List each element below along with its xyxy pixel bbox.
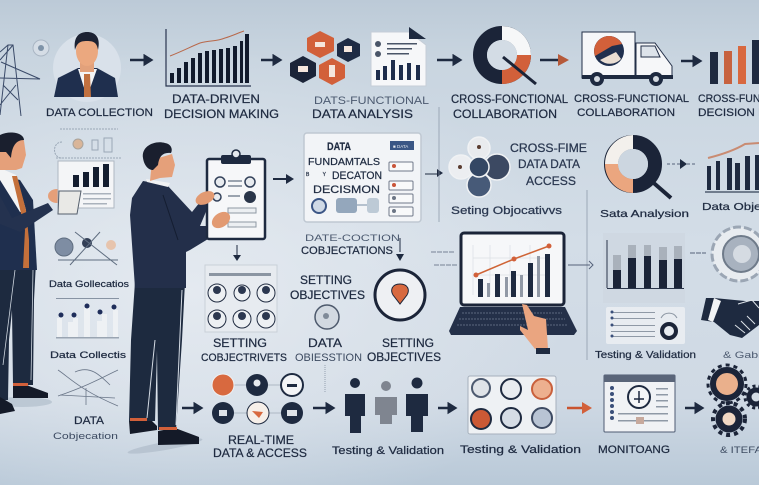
- arrow: [667, 159, 695, 169]
- row 1 labels: DATS-FUNCTIONAL: [314, 95, 429, 107]
- arrow: [685, 407, 697, 409]
- arrow: [431, 252, 458, 265]
- label: OBJECTIVES: [290, 290, 365, 302]
- icon: pointing hand: [520, 304, 550, 354]
- figure: left businessman: [0, 133, 66, 414]
- arrow: [261, 59, 275, 61]
- row 1 labels: COLLABORATION: [577, 107, 675, 119]
- label: COBJECTRIVETS: [201, 352, 287, 364]
- icon: hexagon cluster: [290, 31, 360, 85]
- label: [290, 273, 365, 302]
- label: [301, 233, 400, 257]
- icon: delivery truck: [582, 32, 673, 86]
- chart: report with bars: [58, 161, 114, 214]
- icon: faded network: [55, 232, 118, 265]
- label: Data Objec: [702, 201, 759, 213]
- label: CROSS-FIME: [510, 143, 587, 155]
- panel: icon grid: [468, 376, 556, 434]
- icon: small circle badge: [315, 305, 339, 329]
- icon group: real-time circles: [212, 374, 303, 424]
- row 1 labels: DATA COLLECTION: [46, 107, 153, 119]
- label: DATA DATA: [518, 159, 580, 171]
- icon: donut with magnifier: [480, 26, 536, 84]
- icon: gear: [712, 227, 759, 281]
- row 1 labels: [46, 92, 759, 121]
- arrow: [690, 252, 706, 254]
- label: [201, 338, 287, 364]
- panel: data fundamentals: DECISMON: [313, 184, 380, 196]
- label: [53, 415, 118, 442]
- label: & Gabb: [723, 350, 759, 361]
- label: [451, 143, 587, 217]
- icon: donut with magnifier 2: [605, 135, 671, 198]
- row 1 labels: CROSS-FONCTIONAL: [451, 92, 568, 106]
- icon: petal cluster: [449, 137, 510, 197]
- label: OBJECTIVES: [367, 352, 441, 364]
- bar chart: right edge: [710, 40, 759, 84]
- label: Testing & Validation: [332, 445, 444, 457]
- arrow: [681, 60, 695, 62]
- label: SETTING: [382, 338, 434, 350]
- label: DATA: [308, 336, 342, 350]
- label: [213, 435, 307, 460]
- label: DATA & ACCESS: [213, 446, 307, 460]
- label: Testing & Validation: [460, 444, 581, 456]
- panel: data fundamentals: DECATON: [332, 170, 382, 182]
- arrow: [437, 59, 455, 61]
- icon: three people: [345, 378, 428, 433]
- arrow: [273, 178, 288, 180]
- chart: faded bars with dots: [56, 298, 119, 338]
- arrow: [567, 402, 592, 414]
- chart: rising bars with trend line: [166, 29, 251, 86]
- label: ACCESS: [526, 176, 576, 188]
- arrow: [540, 54, 569, 66]
- panel: data fundamentals: ■ DATA: [393, 144, 408, 149]
- label: Data Collectis: [50, 350, 126, 361]
- label: & ITEFA: [720, 445, 759, 456]
- chart: stacked bars: [603, 233, 685, 303]
- icon: laptop with chart: [449, 233, 577, 335]
- icon: gears: [708, 365, 759, 435]
- arrow: [233, 245, 241, 261]
- arrow: [396, 238, 404, 261]
- row 1 labels: COLLABORATION: [453, 107, 557, 121]
- label: COBJECTATIONS: [301, 245, 393, 257]
- panel: data fundamentals: DATA: [327, 141, 351, 153]
- label: Data Gollecatios: [49, 279, 129, 290]
- row 1 labels: DATA-DRIVEN: [172, 92, 260, 106]
- icon: clipboard: [193, 150, 265, 239]
- panel: checklist with ring: [606, 307, 685, 344]
- panel: data fundamentals: BY: [306, 172, 327, 178]
- label: SETTING: [213, 338, 267, 350]
- panel: data fundamentals: [304, 133, 421, 222]
- arrow: [438, 407, 450, 409]
- label: Cobjecation: [53, 431, 118, 442]
- label: SETTING: [300, 273, 352, 287]
- icon: handshake: [701, 298, 759, 338]
- arrow: [568, 261, 593, 269]
- icon: document with chart: [371, 27, 426, 86]
- arrow: [425, 169, 443, 177]
- label: DATE-COCTION: [305, 233, 400, 243]
- label: OBIESSTION: [295, 352, 362, 364]
- row 1 labels: DECISION MAKING: [164, 107, 279, 121]
- label: Testing & Validation: [595, 349, 696, 361]
- label: Seting Objocativvs: [451, 205, 563, 217]
- chart: bars with trend right: [705, 143, 759, 193]
- row 1 labels: DATA ANALYSIS: [312, 107, 413, 121]
- label: [367, 338, 441, 364]
- label: REAL-TIME: [228, 435, 294, 447]
- icon: pylon: [0, 40, 49, 116]
- panel: people icon grid: [205, 265, 277, 332]
- label: DATA: [74, 415, 105, 427]
- label: Sata Analysion: [600, 208, 689, 220]
- panel: monitoring dashboard: [604, 375, 675, 432]
- arrow: [313, 407, 328, 409]
- figure: central businessman: [127, 142, 218, 457]
- label: MONITOANG: [598, 444, 670, 456]
- arrow: [130, 59, 146, 61]
- panel: data fundamentals: FUNDAMTALS: [308, 156, 380, 168]
- row 1 labels: CROSS-FUNCTIONAL: [574, 93, 689, 105]
- icon: crossing network lines: [58, 370, 118, 406]
- arrow: [182, 407, 196, 409]
- icon: small faded diagram: [54, 129, 122, 158]
- icon: clock target: [375, 270, 425, 320]
- icon: businessman portrait: [53, 32, 121, 102]
- label: [295, 336, 362, 364]
